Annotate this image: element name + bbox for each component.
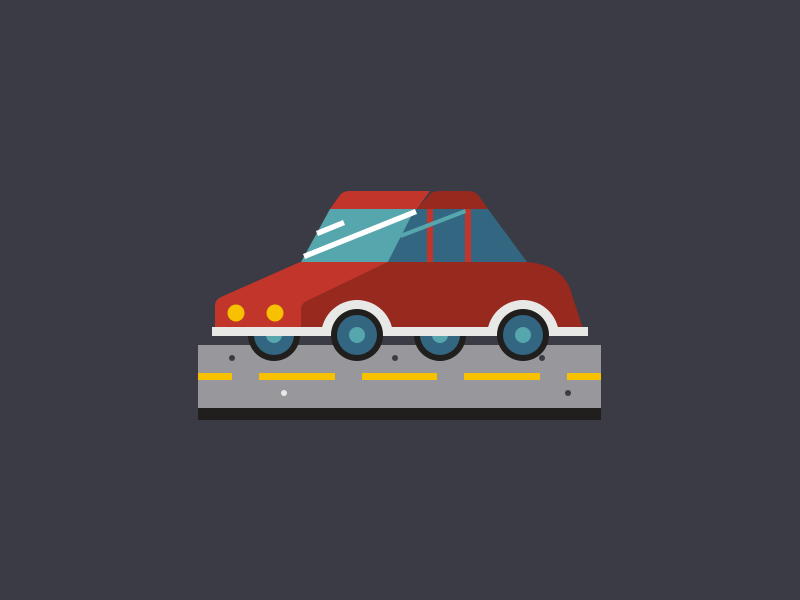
road: lane dashes	[198, 373, 601, 380]
far wheels	[248, 309, 466, 361]
near wheels	[331, 309, 549, 361]
bumper strip	[212, 327, 588, 336]
windows	[301, 209, 415, 262]
reflections	[303, 209, 417, 259]
window pillars	[427, 209, 433, 262]
roof	[330, 191, 430, 209]
main body	[301, 262, 583, 328]
road	[198, 345, 601, 420]
wheel arches	[321, 300, 393, 336]
headlights	[228, 304, 244, 322]
hood	[215, 262, 388, 328]
road: pebbles	[229, 355, 571, 396]
car body	[212, 191, 588, 336]
